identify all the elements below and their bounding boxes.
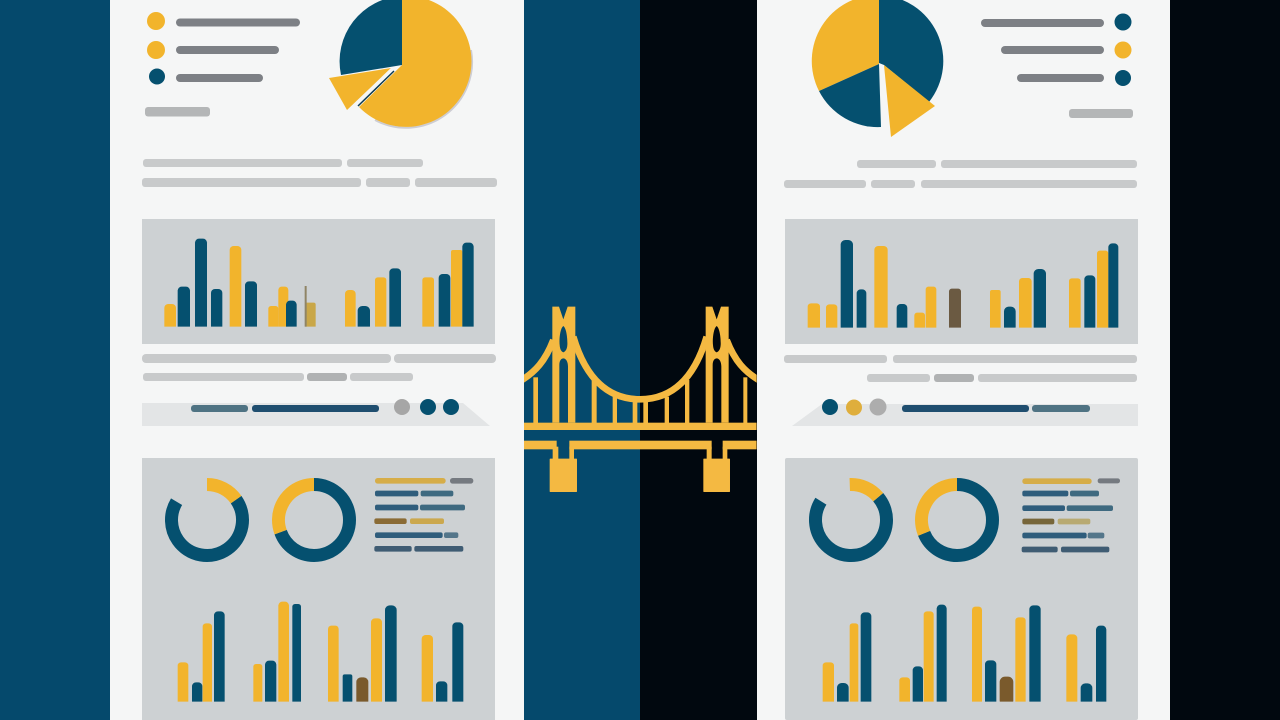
- legend lines: left lower: [374, 478, 473, 552]
- icon: suspension bridge: [522, 307, 759, 492]
- pie chart: right: [812, 0, 943, 137]
- donut chart: left second: [268, 474, 360, 566]
- panel: left report: [110, 0, 524, 720]
- status strip: left: [142, 399, 490, 426]
- donut chart: right first: [801, 470, 901, 570]
- bars: right upper chart: [808, 240, 1118, 332]
- text lines: left middle: [142, 354, 496, 381]
- legend: right pie: [981, 14, 1132, 86]
- caption bar: right: [1069, 109, 1133, 118]
- panel: right lower charts: [785, 458, 1138, 720]
- bar chart panel: right upper: [785, 219, 1138, 344]
- text lines: right intro: [784, 160, 1137, 188]
- donut chart: left first: [158, 471, 256, 569]
- legend lines: right lower: [1022, 478, 1120, 552]
- text lines: left intro: [142, 159, 497, 187]
- bar chart panel: left upper: [142, 219, 495, 344]
- bars: left lower chart: [178, 602, 463, 706]
- bars: right lower chart: [823, 605, 1106, 706]
- status strip: right: [792, 398, 1138, 426]
- pie chart: left: [329, 0, 472, 128]
- text lines: right middle: [784, 355, 1137, 382]
- donut chart: right second: [911, 474, 1003, 566]
- panel: right report: [757, 0, 1170, 720]
- panel: left lower charts: [142, 458, 495, 720]
- legend: left pie: [147, 12, 300, 84]
- caption bar: left: [145, 107, 210, 116]
- bars: left upper chart: [164, 239, 474, 331]
